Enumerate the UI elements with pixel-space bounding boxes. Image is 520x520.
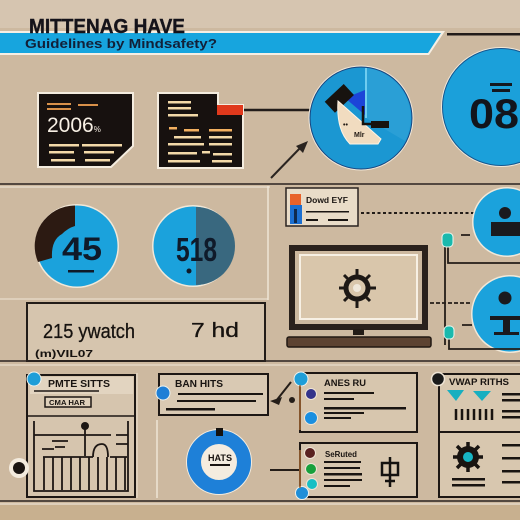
donut chart — [186, 428, 252, 495]
icon: teal dot — [306, 478, 318, 490]
node: bottom — [296, 486, 308, 500]
icon: hexagon — [306, 388, 316, 400]
panel: bar chart — [27, 375, 135, 497]
mini bars — [456, 409, 492, 420]
legend card: Dowd EYF — [306, 196, 348, 205]
badge: right panel — [432, 372, 444, 386]
donut value: 518 — [176, 231, 217, 268]
connector — [244, 109, 310, 111]
icon: blue tile — [290, 205, 302, 224]
panel: bar chart: CMA HAR — [49, 400, 85, 407]
panel heading: SeRuted — [325, 450, 357, 459]
icon: teal chevron right — [473, 391, 491, 401]
panel: list top — [300, 373, 417, 432]
header band — [0, 31, 520, 55]
icon: green dot — [306, 464, 316, 474]
panel heading: PMTE SITTS — [48, 379, 110, 390]
icon: cog — [453, 442, 483, 472]
panel heading: ANES RU — [324, 378, 366, 388]
person circle: bottom — [471, 275, 520, 353]
panel: list bottom — [300, 443, 417, 497]
panel: summary figures — [27, 303, 265, 361]
bar chart — [34, 421, 128, 491]
donut: 45 — [35, 204, 119, 288]
node: teal top — [442, 233, 453, 247]
node: top — [294, 372, 308, 386]
icon: orange tile — [290, 194, 301, 205]
panel: dark text card — [158, 93, 243, 168]
panel heading: VWAP RITHS — [449, 377, 509, 387]
dotted connector — [361, 212, 475, 214]
panel: dark stat card — [38, 93, 133, 167]
chart caption box — [45, 397, 91, 407]
panel: right summary — [439, 374, 520, 497]
arrow connector — [270, 382, 295, 405]
badge: note — [156, 386, 170, 400]
badge — [304, 412, 318, 424]
icon: laptop — [287, 248, 431, 347]
arrow — [271, 141, 308, 178]
pie chart: Mlr — [354, 132, 365, 139]
figure left: 215 ywatch — [43, 321, 135, 343]
pie chart — [308, 66, 414, 170]
icon: red dot — [304, 448, 316, 458]
subtitle: Guidelines by Mindsafety? — [25, 36, 217, 51]
caption: (m)VIL07 — [35, 349, 94, 360]
donut value: 45 — [62, 231, 102, 267]
figure right: 7 hd — [191, 320, 239, 342]
badge: heart — [9, 458, 29, 478]
legend card — [286, 188, 358, 226]
red tag — [217, 105, 243, 115]
stat number: 08 — [469, 90, 519, 137]
icon: device — [382, 457, 398, 487]
node: teal bottom — [444, 326, 454, 339]
big circle: stat — [441, 47, 520, 167]
person circle: top — [472, 187, 520, 257]
icon: gear — [339, 269, 376, 308]
pie label: •• — [343, 122, 348, 129]
panel heading: BAN HITS — [175, 379, 223, 390]
network connectors — [430, 235, 520, 349]
donut label: HATS — [208, 453, 232, 463]
panel: note — [159, 374, 268, 415]
stat value: 2006% — [47, 114, 101, 137]
icon: teal chevron left — [447, 390, 464, 401]
donut: 518 — [152, 205, 235, 287]
title: MITTENAG HAVE — [29, 15, 185, 38]
badge: panel a — [27, 372, 41, 386]
